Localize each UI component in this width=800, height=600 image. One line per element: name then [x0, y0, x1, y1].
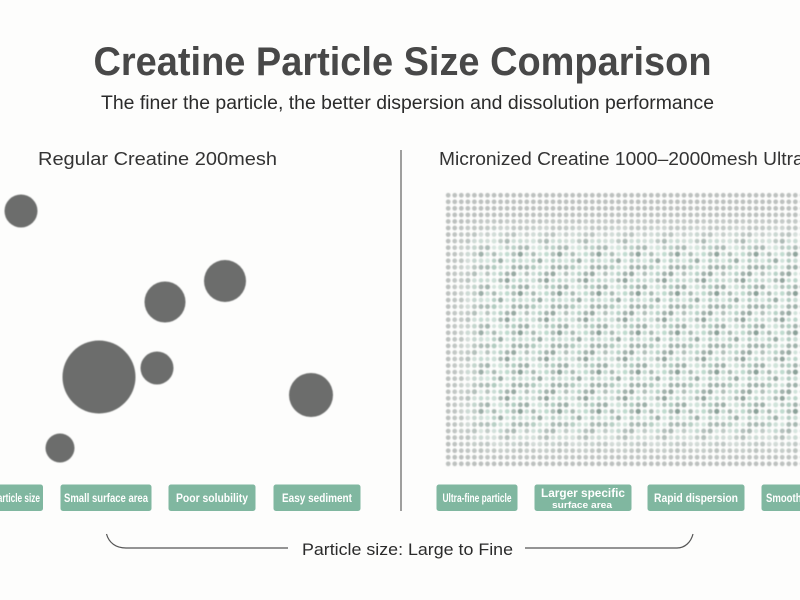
- pill: larger specific surface area: [534, 484, 632, 511]
- label pills: regular creatine: [0, 484, 360, 511]
- heading: regular creatine: Regular Creatine 200mesh: [38, 148, 277, 169]
- bracket: right: [525, 534, 693, 548]
- size scale: [106, 534, 693, 559]
- pill: small surface area: Small surface area: [64, 493, 148, 505]
- pill: large particle size: [0, 484, 43, 511]
- pill: easy sediment: [274, 484, 360, 511]
- fine particle field: [445, 192, 800, 468]
- subtitle: The finer the particle, the better dispersion and dissolution performance: [101, 93, 714, 114]
- pill: ultra-fine particle: Ultra-fine particle: [442, 493, 512, 505]
- pill: poor solubility: [168, 484, 256, 511]
- bracket: left: [106, 534, 288, 548]
- panel: micronized creatine: [436, 148, 800, 511]
- pill: smooth texture: [762, 484, 800, 511]
- pill: small surface area: [60, 484, 152, 511]
- pill: poor solubility: Poor solubility: [176, 493, 249, 505]
- pill: ultra-fine particle: [436, 484, 518, 511]
- pill: larger specific surface area: Larger specific: [541, 488, 626, 500]
- pill: easy sediment: Easy sediment: [282, 493, 352, 505]
- label pills: micronized creatine: [436, 484, 800, 511]
- panel: regular creatine: [0, 148, 360, 511]
- center divider: [400, 150, 402, 511]
- pill: rapid dispersion: [648, 484, 744, 511]
- pill: rapid dispersion: Rapid dispersion: [654, 491, 738, 505]
- large particles: [4, 194, 333, 462]
- scale label: Particle size: Large to Fine: [302, 540, 513, 559]
- title: Creatine Particle Size Comparison: [94, 40, 712, 84]
- pill: larger specific surface area: surface area: [552, 500, 613, 511]
